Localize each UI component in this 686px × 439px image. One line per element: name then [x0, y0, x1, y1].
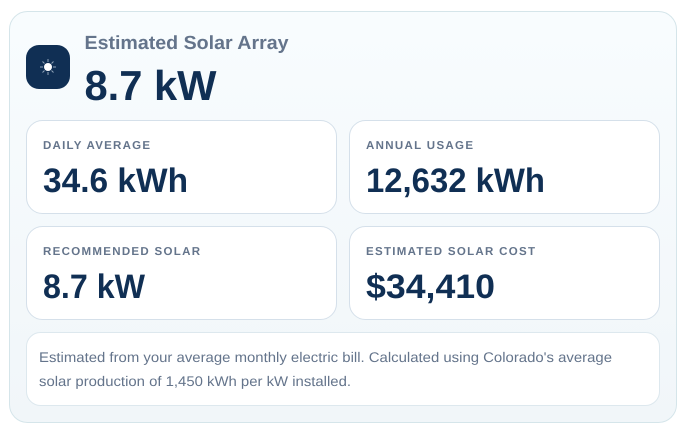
- card: estimated solar cost: ESTIMATED SOLAR COST: [366, 246, 535, 258]
- card: daily average: 34.6 kWh: [43, 162, 188, 200]
- card: annual usage: 12,632 kWh: [366, 162, 545, 200]
- heading: Estimated Solar Array: [84, 33, 289, 54]
- card: recommended solar: [26, 226, 336, 320]
- card: estimated solar cost: $34,410: [366, 268, 495, 306]
- icon: sun: [26, 45, 70, 89]
- card: recommended solar: 8.7 kW: [43, 268, 146, 306]
- card: daily average: [26, 120, 336, 214]
- note: calculation explanation: [26, 332, 660, 406]
- headline value: 8.7 kW: [84, 62, 217, 109]
- card: recommended solar: RECOMMENDED SOLAR: [43, 246, 201, 258]
- card: daily average: DAILY AVERAGE: [43, 140, 150, 152]
- card: annual usage: ANNUAL USAGE: [366, 140, 473, 152]
- note: calculation explanation: solar production of 1,450 kWh per kW installed.: [39, 373, 351, 389]
- note: calculation explanation: Estimated from your average monthly electric bill. Calculated using Colorado's average: [39, 349, 612, 365]
- card: estimated solar cost: [350, 226, 660, 320]
- card: annual usage: [350, 120, 660, 214]
